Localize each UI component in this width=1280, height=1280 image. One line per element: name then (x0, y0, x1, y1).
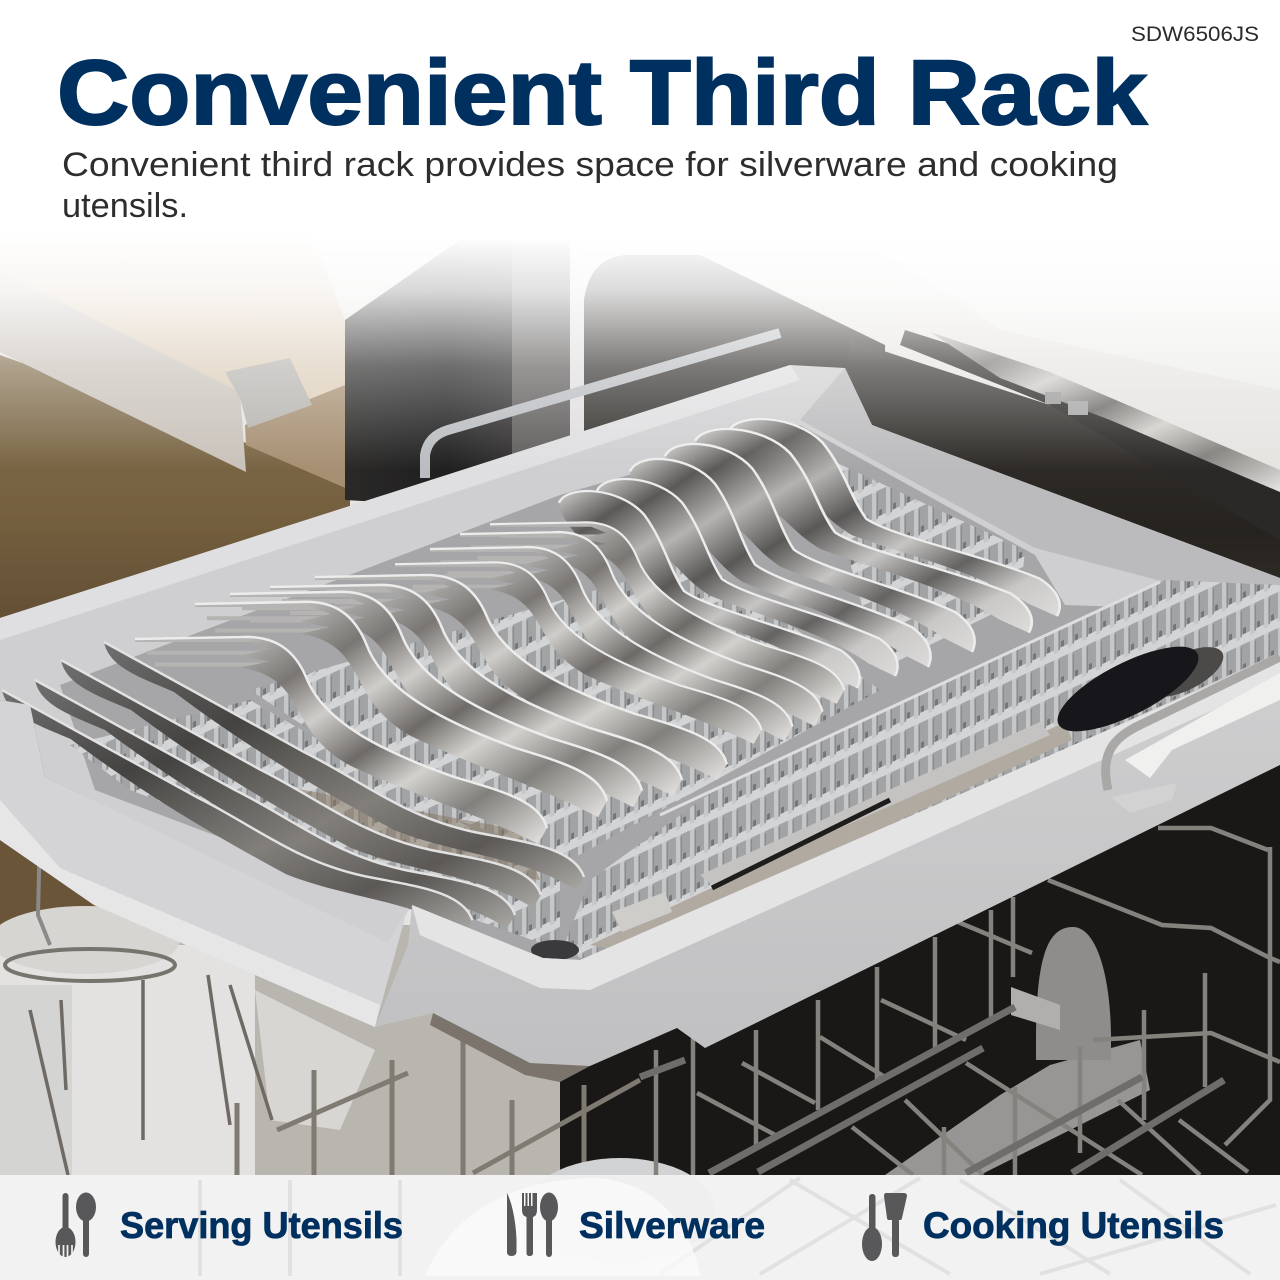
shadow slot under tray (430, 1013, 590, 1082)
spoons (559, 419, 1060, 688)
tray back rail (425, 333, 780, 478)
lower dark interior (555, 760, 1280, 1175)
dishwasher interior right (820, 340, 1280, 660)
label: silverware: Silverware (579, 1205, 765, 1246)
knives (2, 642, 584, 933)
footer wire ghost (200, 1178, 1276, 1276)
title: Convenient Third Rack (57, 42, 1148, 144)
right front rim (412, 655, 1280, 990)
right front face (375, 655, 1280, 1066)
white fade at top (0, 0, 1280, 470)
subtitle (62, 146, 1118, 225)
tray walls (0, 365, 1280, 965)
third rack tray (0, 365, 1280, 965)
cream cabinet behind drawer (0, 230, 345, 425)
pin field middle (250, 560, 880, 860)
tray front wall (0, 655, 1280, 1082)
lower wood strip at left edge (0, 660, 120, 960)
label: cooking utensils: Cooking Utensils (923, 1205, 1224, 1246)
wood cabinet (0, 355, 350, 660)
lower wire rack left (237, 1035, 640, 1175)
dishwasher door interior (584, 255, 885, 500)
silver appliance edge (512, 240, 570, 510)
icon: cooking utensils (862, 1193, 907, 1261)
white seam (570, 240, 584, 490)
tray floor (60, 425, 1280, 960)
label: serving utensils: Serving Utensils (120, 1205, 403, 1246)
drawer pull (225, 358, 312, 428)
left front wall (0, 700, 408, 1027)
subtitle line 1: Convenient third rack provides space for silverware and cooking (62, 146, 1118, 184)
drawer front panel (0, 272, 246, 472)
icon: silverware (507, 1192, 558, 1257)
model number: SDW6506JS (1131, 23, 1259, 46)
lower wire rack right (656, 828, 1280, 1175)
front handle rail (1106, 657, 1280, 813)
footer band (0, 1175, 1280, 1280)
right wall darker band (800, 368, 1280, 612)
forks (135, 522, 844, 844)
thick rack bars (640, 1007, 1224, 1173)
pin row divider (660, 582, 1160, 815)
footer plate ghost (425, 1178, 700, 1276)
countertop right (880, 250, 1280, 390)
rear rim highlight (0, 365, 800, 640)
spray arm and cup holder (885, 927, 1150, 1175)
pin field left (70, 700, 560, 950)
dark appliance (345, 240, 515, 510)
pin row right (560, 580, 1280, 960)
glasses (0, 830, 375, 1175)
left wall rim highlight (0, 800, 380, 1027)
pin field rear (820, 455, 1025, 670)
plate (525, 1158, 715, 1262)
subtitle line 2: utensils. (62, 187, 188, 225)
tan cabinet side (245, 385, 350, 490)
brown reflections in left floor (250, 780, 540, 880)
grey backdrop lower left (0, 925, 560, 1175)
icon: serving utensils (56, 1192, 96, 1257)
tongs (531, 630, 1231, 960)
upper rack strip with cutlery (900, 330, 1280, 540)
